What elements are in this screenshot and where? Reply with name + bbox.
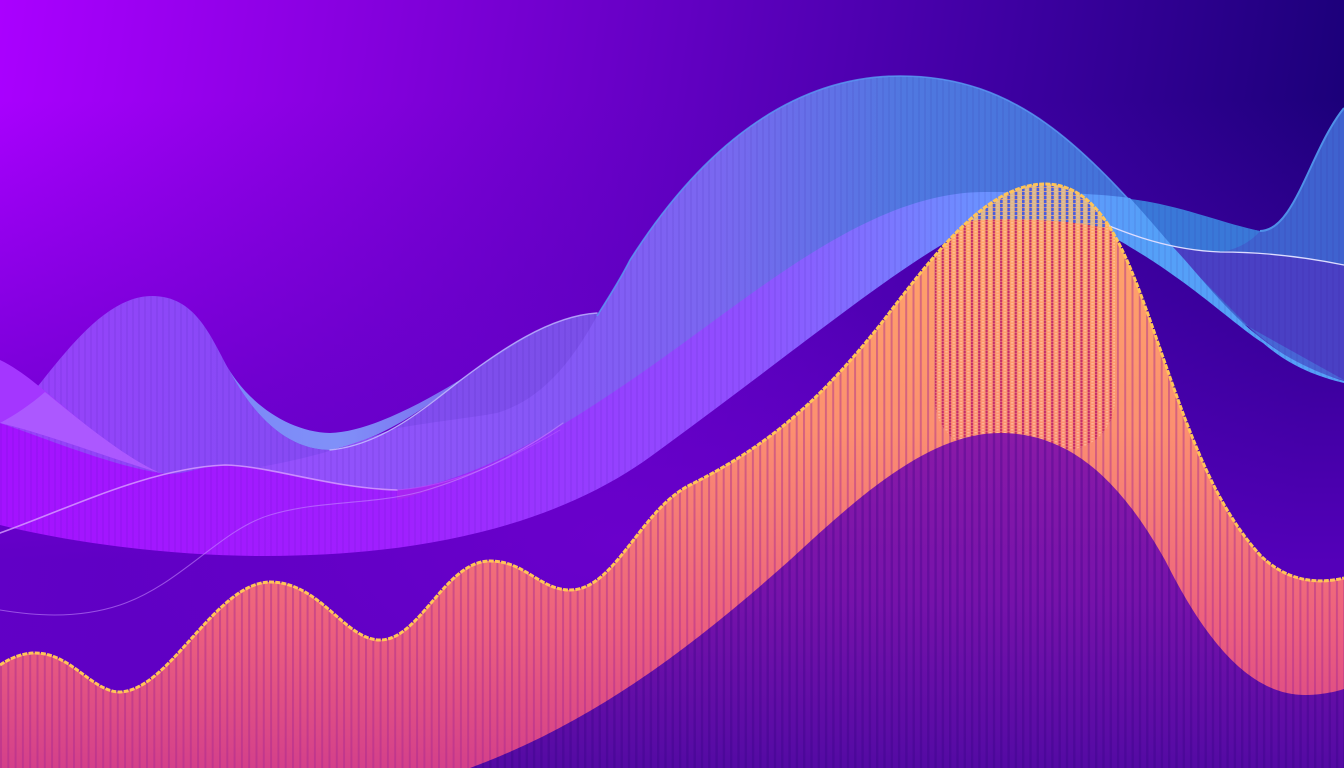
crest overlap highlight (0, 392, 160, 473)
wave: small left crest (0, 360, 160, 473)
dotted yellow crest outline (0, 184, 1344, 692)
lip highlight on bump (228, 313, 597, 450)
thin light lines (0, 220, 1344, 615)
wave: left bump (0, 296, 640, 490)
wave: bright violet band (0, 192, 1344, 556)
dark purple foreground hill (470, 433, 1344, 768)
pink sliver inside band (397, 405, 590, 500)
wave: large blue crest (260, 76, 1344, 510)
orange striped hill (0, 182, 1344, 768)
inner dense striped panel (935, 170, 1115, 450)
wave: right blue rise (1090, 108, 1344, 381)
